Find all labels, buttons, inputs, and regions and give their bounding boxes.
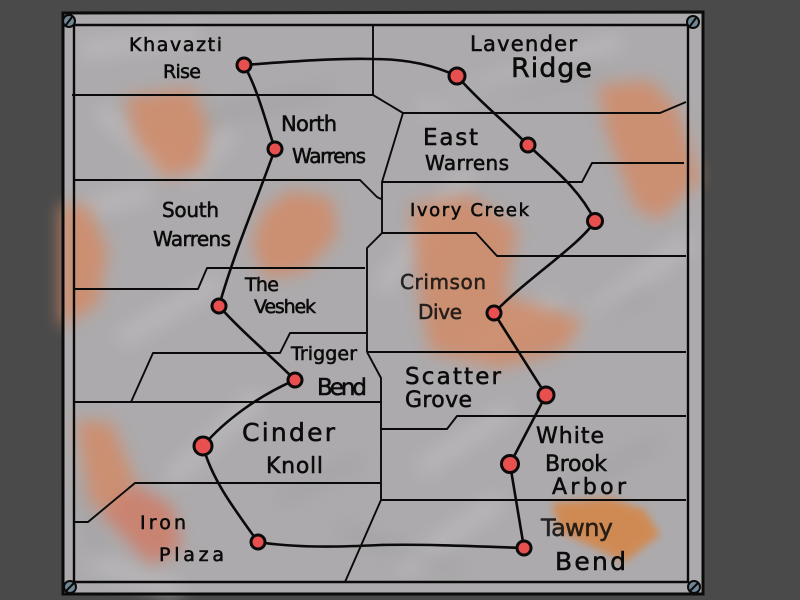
district labels: Iron [140, 512, 186, 534]
district labels: Knoll [266, 454, 323, 479]
district labels: Warrens [153, 227, 231, 251]
corner rivets [63, 15, 700, 593]
district labels: Grove [405, 388, 472, 413]
district labels: Scatter [405, 364, 502, 390]
district labels: Trigger [290, 343, 357, 365]
district labels: White [536, 424, 604, 449]
district labels: Brook [545, 452, 607, 477]
district labels [129, 32, 627, 576]
district labels: Cinder [242, 418, 336, 447]
hazard blobs [60, 80, 700, 565]
district labels: Warrens [292, 144, 366, 168]
district labels: Bend [555, 547, 626, 576]
district labels: South [162, 198, 219, 222]
outer frame [63, 12, 703, 594]
district labels: Veshek [254, 296, 316, 318]
route line [203, 59, 595, 548]
district labels: East [423, 125, 478, 151]
district labels: Ivory Creek [410, 200, 530, 221]
district labels: North [281, 112, 337, 136]
map paper [63, 13, 703, 594]
district labels: Warrens [425, 151, 509, 175]
district labels: Bend [317, 375, 367, 401]
route nodes [194, 58, 602, 555]
district boundaries [72, 26, 686, 582]
district labels: Arbor [552, 475, 627, 500]
district labels: Khavazti [129, 34, 222, 56]
district labels: Ridge [511, 53, 592, 84]
district labels: Dive [418, 300, 462, 324]
district labels: Lavender [470, 32, 577, 56]
district labels: The [244, 274, 279, 296]
district labels: Rise [163, 61, 201, 83]
district labels: Plaza [159, 544, 224, 566]
district labels: Crimson [400, 270, 486, 294]
district labels: Tawny [540, 514, 613, 542]
